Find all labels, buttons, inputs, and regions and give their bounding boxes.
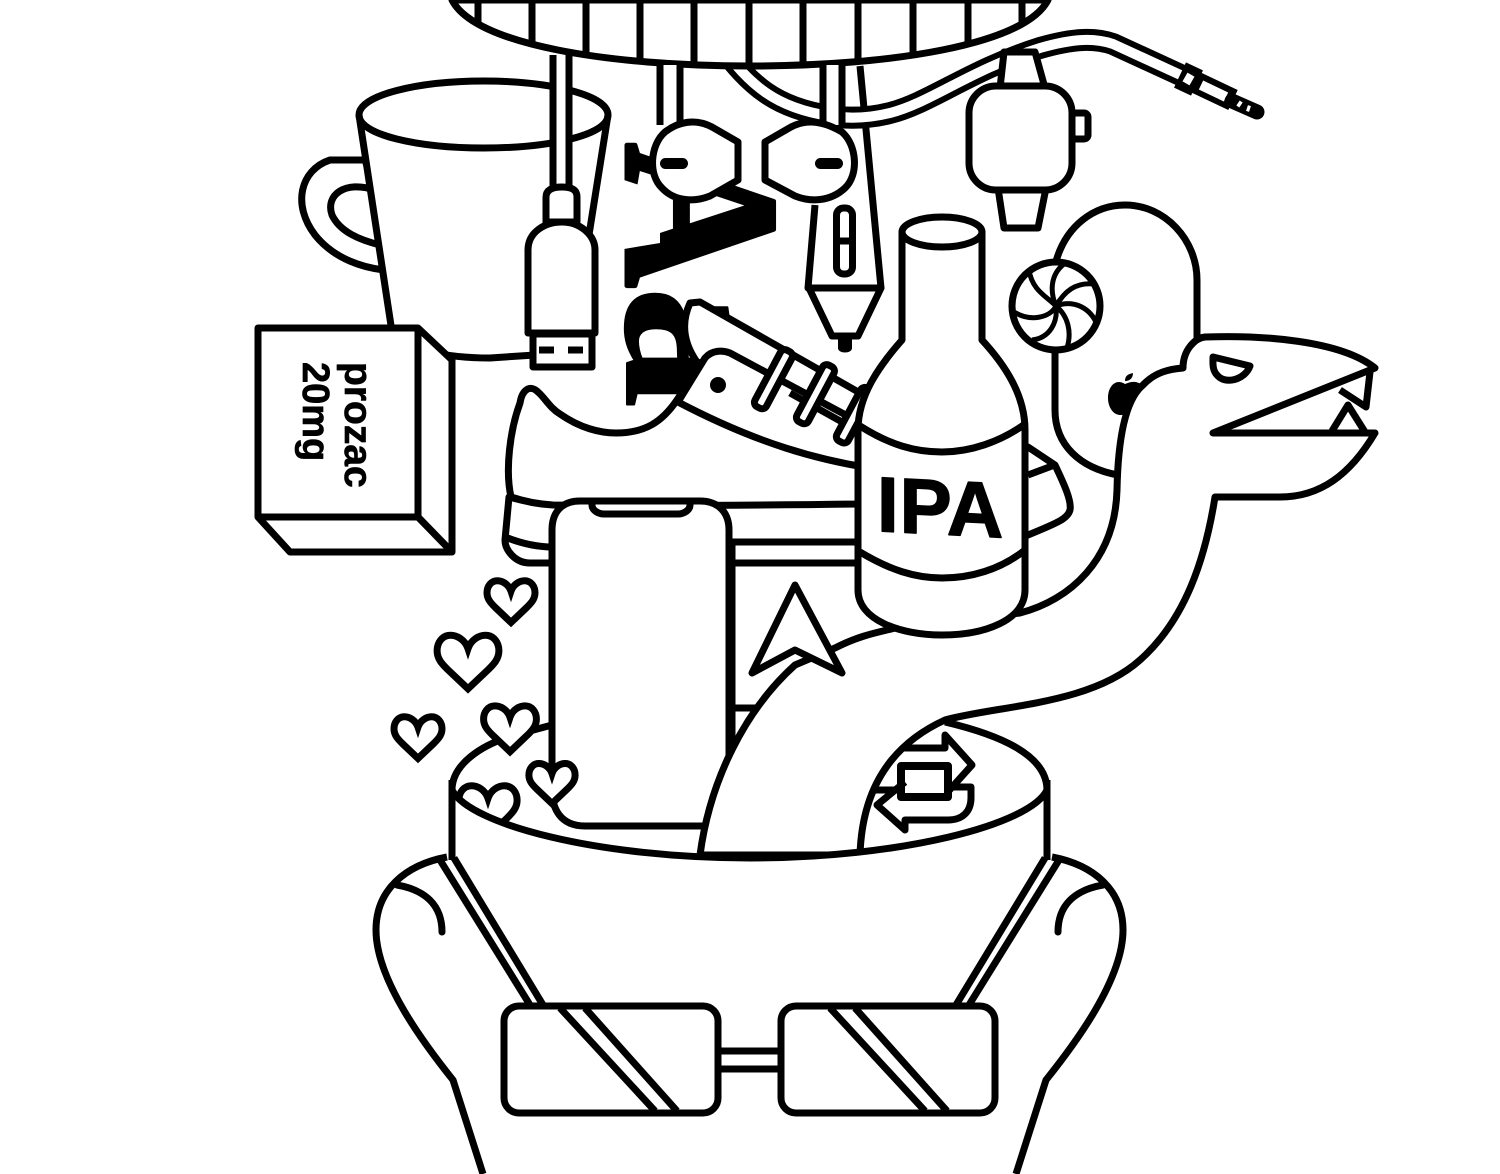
figure body fill <box>376 862 1123 1174</box>
repost icon <box>872 735 972 830</box>
right earbud <box>765 122 854 200</box>
left strap <box>440 858 543 1005</box>
stylus pen <box>808 66 881 352</box>
camel head and neck <box>700 337 1375 855</box>
tongue <box>685 302 860 430</box>
left earbud <box>653 122 738 200</box>
cylinder base wall <box>452 780 1047 880</box>
beer bottle labelled IPA: IPA <box>877 460 1004 555</box>
cursor arrow <box>752 585 842 673</box>
audio cable <box>720 40 1187 118</box>
right strap <box>956 858 1059 1005</box>
sole <box>505 497 860 563</box>
sunglasses <box>504 1006 995 1113</box>
smartwatch <box>969 52 1088 228</box>
lace panel <box>678 351 870 468</box>
left shoulder <box>376 857 483 1174</box>
audio jack plug <box>1180 75 1257 112</box>
left ear curve <box>397 885 442 932</box>
swirl candy <box>1012 262 1100 350</box>
hat brim with vertical stripes <box>452 0 1048 66</box>
pill box labelled prozac <box>258 328 452 552</box>
right shoulder <box>1016 857 1123 1174</box>
black rotated letter A: A <box>579 143 825 287</box>
smartphone <box>552 501 729 826</box>
apple logo <box>1108 373 1142 415</box>
figure shoulders and straps <box>376 857 1123 1174</box>
earbud stem cables <box>660 65 842 125</box>
lollipop stick loop <box>1055 205 1197 475</box>
sneaker <box>505 302 1070 563</box>
right ear curve <box>1058 885 1103 932</box>
laces <box>753 348 794 411</box>
phone stand back lines <box>732 540 762 760</box>
box label: prozac <box>336 362 379 488</box>
coffee mug <box>302 81 608 358</box>
box label <box>294 362 379 488</box>
bottle label lines <box>860 424 1025 578</box>
toe <box>1000 440 1070 535</box>
black rotated letter a: a <box>578 286 824 408</box>
usb plug and cable <box>528 55 595 367</box>
upper <box>508 355 860 505</box>
hearts <box>394 581 575 836</box>
box label: 20mg <box>294 362 336 461</box>
cylinder base top <box>452 722 1047 860</box>
beer bottle labelled IPA <box>858 217 1025 635</box>
